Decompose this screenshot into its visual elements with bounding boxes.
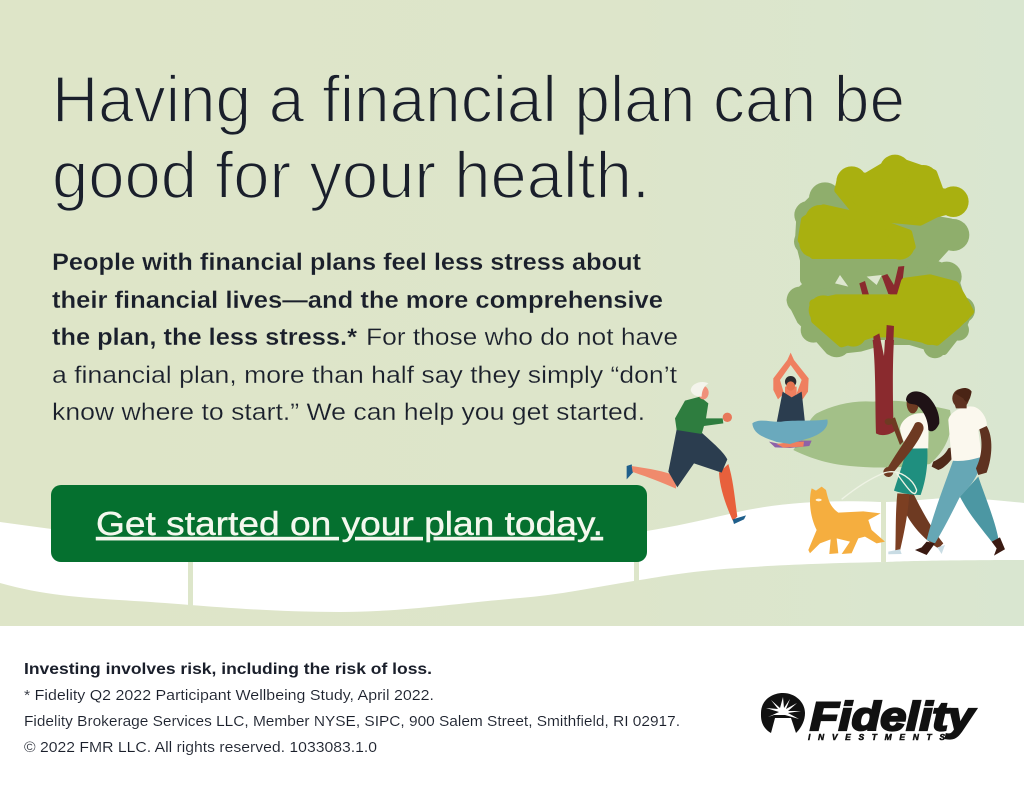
body text: People with financial plans feel less stress about bbox=[52, 249, 641, 276]
Fidelity logo: Fidelity bbox=[810, 695, 976, 739]
dog bbox=[808, 487, 885, 554]
body text: a financial plan, more than half say they simply “don’t bbox=[52, 362, 677, 389]
footer text: Fidelity Brokerage Services LLC, Member NYSE, SIPC, 900 Salem Street, Smithfield, RI 02917. bbox=[24, 713, 680, 730]
sign posts bbox=[188, 500, 886, 606]
footer text: Investing involves risk, including the risk of loss. bbox=[24, 661, 432, 678]
tree back foliage bbox=[792, 188, 968, 350]
background panel bbox=[0, 0, 1024, 626]
ground: white path bbox=[0, 498, 1024, 612]
body text bbox=[52, 249, 678, 426]
woman walking bbox=[883, 391, 945, 554]
footer text bbox=[24, 661, 680, 756]
grass shadow under tree bbox=[793, 401, 951, 468]
illustration: people and dog bbox=[627, 340, 1005, 556]
title: Having a financial plan can be bbox=[52, 62, 905, 136]
tree lime foliage bbox=[802, 160, 970, 343]
dog leash bbox=[842, 472, 917, 499]
call to action button: Get started on your plan today. bbox=[96, 505, 603, 542]
man walking bbox=[915, 388, 1005, 556]
footer text: * Fidelity Q2 2022 Participant Wellbeing Study, April 2022. bbox=[24, 687, 434, 704]
illustration: tree canopy bbox=[787, 155, 975, 360]
Fidelity logo: INVESTMENTS bbox=[808, 732, 945, 742]
call to action button bbox=[51, 485, 647, 562]
lower trunk branches bbox=[873, 325, 894, 360]
Fidelity logo bbox=[761, 693, 976, 742]
title: good for your health. bbox=[52, 138, 650, 212]
body text: For those who do not have bbox=[366, 324, 678, 351]
yoga person bbox=[752, 353, 828, 448]
body text: know where to start.” We can help you get started. bbox=[52, 399, 645, 426]
tree trunk bbox=[873, 340, 895, 435]
title bbox=[52, 62, 905, 212]
body text: the plan, the less stress.* bbox=[52, 324, 357, 351]
runner bbox=[627, 382, 746, 524]
body text: their financial lives—and the more comprehensive bbox=[52, 287, 663, 314]
footer text: © 2022 FMR LLC. All rights reserved. 1033083.1.0 bbox=[24, 739, 377, 756]
tree branches bbox=[859, 266, 904, 298]
canopy gaps bbox=[835, 275, 882, 287]
